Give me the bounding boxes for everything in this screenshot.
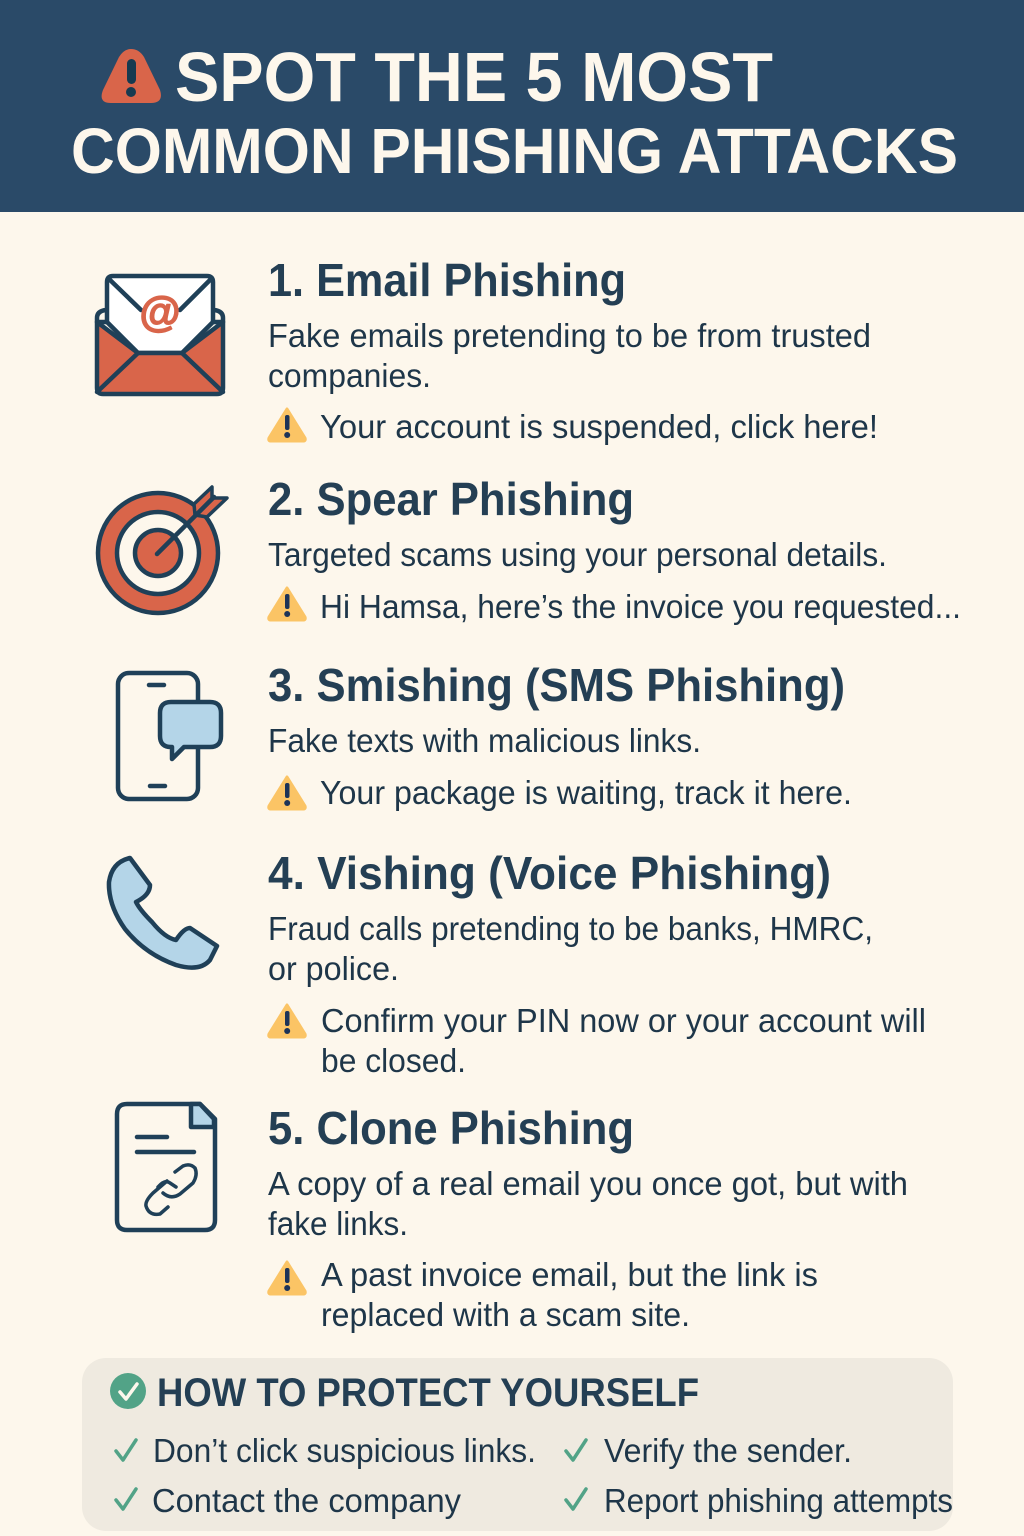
description <box>268 1165 908 1242</box>
example <box>321 1256 818 1333</box>
heading: 3. Smishing (SMS Phishing) <box>268 659 845 711</box>
icon: green check circle <box>110 1373 146 1409</box>
icon: target with arrow <box>98 487 227 613</box>
checklist item: Verify the sender. <box>604 1432 852 1469</box>
example: replaced with a scam site. <box>321 1296 690 1333</box>
icon: telephone handset <box>109 858 217 968</box>
example: A past invoice email, but the link is <box>321 1256 818 1293</box>
icon: envelope <box>97 276 223 394</box>
panel: clone phishing <box>117 1102 908 1333</box>
header banner <box>0 0 1024 212</box>
description: Fake emails pretending to be from trusted <box>268 317 871 354</box>
description: Targeted scams using your personal details. <box>268 536 887 573</box>
icon: warning <box>269 777 305 809</box>
description <box>268 317 871 394</box>
icon: warning <box>269 588 305 620</box>
checklist item: Don’t click suspicious links. <box>153 1432 536 1469</box>
description <box>268 910 873 987</box>
description: fake links. <box>268 1205 408 1242</box>
description: Fraud calls pretending to be banks, HMRC, <box>268 910 873 947</box>
checklist item: Contact the company <box>152 1482 461 1519</box>
title: SPOT THE 5 MOST <box>175 38 773 116</box>
heading: HOW TO PROTECT YOURSELF <box>157 1371 699 1415</box>
icon: red warning triangle <box>102 49 161 103</box>
description: or police. <box>268 950 399 987</box>
panel: spear phishing <box>98 473 961 625</box>
example: be closed. <box>321 1042 466 1079</box>
panel: smishing <box>118 659 852 811</box>
example: Hi Hamsa, here’s the invoice you requested... <box>320 588 961 625</box>
heading: 2. Spear Phishing <box>268 473 634 525</box>
heading: 5. Clone Phishing <box>268 1102 634 1154</box>
title: COMMON PHISHING ATTACKS <box>71 115 958 187</box>
title <box>71 38 958 187</box>
example <box>321 1002 926 1079</box>
icon: envelope: @ <box>140 288 180 335</box>
heading: 1. Email Phishing <box>268 254 626 306</box>
icon: document with link <box>117 1104 215 1230</box>
description: Fake texts with malicious links. <box>268 722 701 759</box>
icon: warning <box>269 1005 305 1037</box>
example: Confirm your PIN now or your account will <box>321 1002 926 1039</box>
icon: warning <box>269 1262 305 1294</box>
heading: 4. Vishing (Voice Phishing) <box>268 847 831 899</box>
panel: email phishing <box>97 254 878 445</box>
description: companies. <box>268 357 431 394</box>
icon: phone with message bubble <box>118 673 221 799</box>
description: A copy of a real email you once got, but with <box>268 1165 908 1202</box>
example: Your package is waiting, track it here. <box>320 774 852 811</box>
icon: warning <box>269 409 305 441</box>
panel: how to protect yourself <box>82 1358 953 1531</box>
checklist item: Report phishing attempts <box>604 1482 953 1519</box>
panel: vishing <box>109 847 926 1079</box>
example: Your account is suspended, click here! <box>320 408 878 445</box>
